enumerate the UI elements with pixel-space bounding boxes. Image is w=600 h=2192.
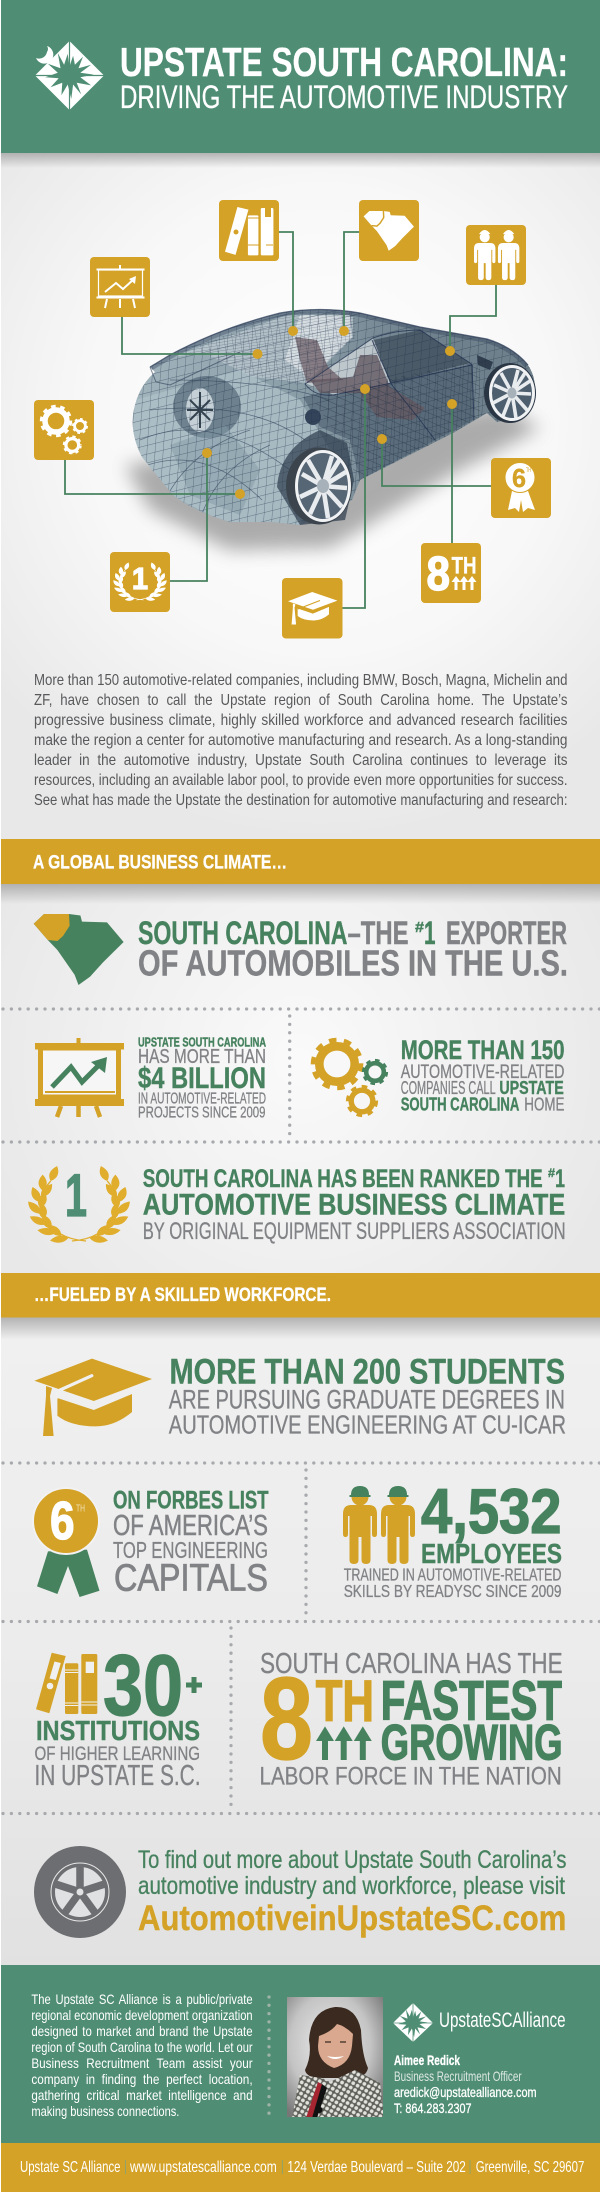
students block [34,1353,566,1440]
icon: laurel with 1 [25,1162,133,1244]
South Carolina exporter row [34,914,568,985]
about paragraph: Business Recruitment Team assist your [31,2056,253,2071]
icon tile: 6th ribbon [491,458,551,518]
icon: 6th ribbon: 6 [50,1491,75,1551]
exporter text: # [415,919,425,936]
alliance logo [393,2003,566,2042]
icon: 6th ribbon [33,1488,100,1597]
8th fastest growing block: TH [316,1669,374,1734]
footer address bar: 124 Verdae Boulevard – Suite 202 [287,2159,466,2176]
about paragraph: company in finding the perfect location, [31,2072,253,2087]
contact details: T: 864.283.2307 [394,2100,472,2116]
about paragraph: designed to market and brand the Upstate [31,2024,253,2039]
dotted dividers: workforce section [3,1463,600,1814]
text: HOME [524,1095,564,1115]
text [401,1035,564,1115]
wireframe body [132,310,536,525]
dotted dividers: climate section [3,1009,600,1142]
8th fastest growing block [260,1648,563,1791]
footer address bar: Upstate SC Alliance [20,2159,121,2176]
call to action [34,1846,566,1938]
Forbes block [33,1487,269,1600]
ground shadow [125,405,540,550]
footer address bar: www.upstatescalliance.com [129,2159,277,2176]
icon: laurel with 1: 1 [65,1162,87,1229]
about paragraph: regional economic development organization [31,2008,253,2023]
about paragraph: region of South Carolina to the world. Let our [31,2040,253,2055]
icon tile: 8th: 8 [426,548,450,601]
section band: skilled workforce [1,1273,600,1340]
icon tile: 6th ribbon: 6 [512,463,526,493]
icon: books [36,1653,97,1714]
about paragraph: gathering critical market intelligence and [31,2088,253,2103]
icon: tire [34,1846,126,1938]
icon tile: 8th: TH [452,552,476,580]
text: HAS MORE THAN [138,1045,266,1068]
icon: 6th ribbon: TH [76,1502,85,1514]
icon tile: South Carolina [359,200,419,261]
exporter text: –THE [348,915,408,951]
text: INSTITUTIONS [36,1715,200,1746]
ranked number one block [25,1162,566,1245]
header banner [1,0,600,168]
text: SOUTH CAROLINA [401,1095,519,1115]
title [120,39,568,115]
institutions block [34,1638,202,1791]
contact details: aredick@upstatealliance.com [394,2084,537,2100]
text: # [548,1166,555,1180]
employees block [343,1477,562,1601]
text: TOP ENGINEERING [113,1537,268,1563]
footer panel [1,1965,600,2143]
text: 30 [103,1638,183,1734]
text [143,1165,566,1245]
text: ON FORBES LIST [113,1487,269,1515]
footer address bar [1,2143,600,2192]
text: 1 [555,1165,565,1193]
about paragraph: The Upstate SC Alliance is a public/private [31,1992,253,2007]
text: $4 BILLION [138,1062,266,1095]
text: EMPLOYEES [421,1538,562,1569]
intro paragraph [34,672,568,809]
rear wheel [277,430,354,525]
icon: three up arrows [316,1726,372,1760]
icon: South Carolina map [34,914,124,985]
about paragraph: making business connections. [31,2104,179,2119]
contact details [394,2052,537,2116]
portrait [287,1997,384,2118]
section band: global business climate: A GLOBAL BUSINESS CLIMATE… [33,852,287,874]
text: UPSTATE SOUTH CAROLINA [138,1036,266,1050]
icon: gears [313,1040,387,1116]
contact details: Aimee Redick [394,2052,460,2068]
text: UPSTATE [499,1078,564,1098]
text: CAPITALS [114,1558,268,1600]
car illustration [120,300,550,550]
icon: two workers [343,1486,415,1564]
icon tile: 8th [421,543,481,603]
text [138,1036,266,1122]
icon tile: graduation cap [282,578,342,638]
text: IN UPSTATE S.C. [34,1759,200,1791]
icon tile: number one laurel [110,552,170,612]
text: 4,532 [421,1477,562,1547]
logo [35,41,104,110]
connector dots [202,326,457,499]
text: PROJECTS SINCE 2009 [138,1104,266,1122]
section band: global business climate [1,839,600,904]
exporter text [138,915,568,984]
text [138,1846,566,1938]
exporter text: 1 [424,915,436,951]
icon: presentation board [35,1038,124,1117]
text [344,1477,562,1601]
section band: skilled workforce: …FUELED BY A SKILLED WORKFORCE. [34,1284,331,1306]
connector lines [65,232,496,608]
text: COMPANIES CALL [401,1078,496,1098]
icon tile: gears [34,400,94,460]
exporter text: SOUTH CAROLINA [138,915,348,951]
icon tile: presentation chart [90,257,150,317]
text: OF AMERICA’S [113,1510,268,1542]
front wheel [484,363,536,423]
icon tile: workers [466,225,526,285]
8th fastest growing block: 8 [260,1653,313,1784]
text: IN AUTOMOTIVE-RELATED [138,1091,266,1108]
text: OF HIGHER LEARNING [34,1743,200,1765]
text [113,1487,269,1600]
text [169,1353,566,1440]
$4 billion block [35,1036,266,1122]
text [34,1638,202,1791]
icon: graduation cap [34,1359,152,1436]
icon tile: books [219,200,279,261]
icon tile: 6th ribbon: TH [526,468,531,474]
contact details: Business Recruitment Officer [394,2068,522,2084]
about paragraph [31,1992,253,2119]
icon tile: number one laurel: 1 [132,561,148,596]
150 companies block [313,1035,564,1116]
